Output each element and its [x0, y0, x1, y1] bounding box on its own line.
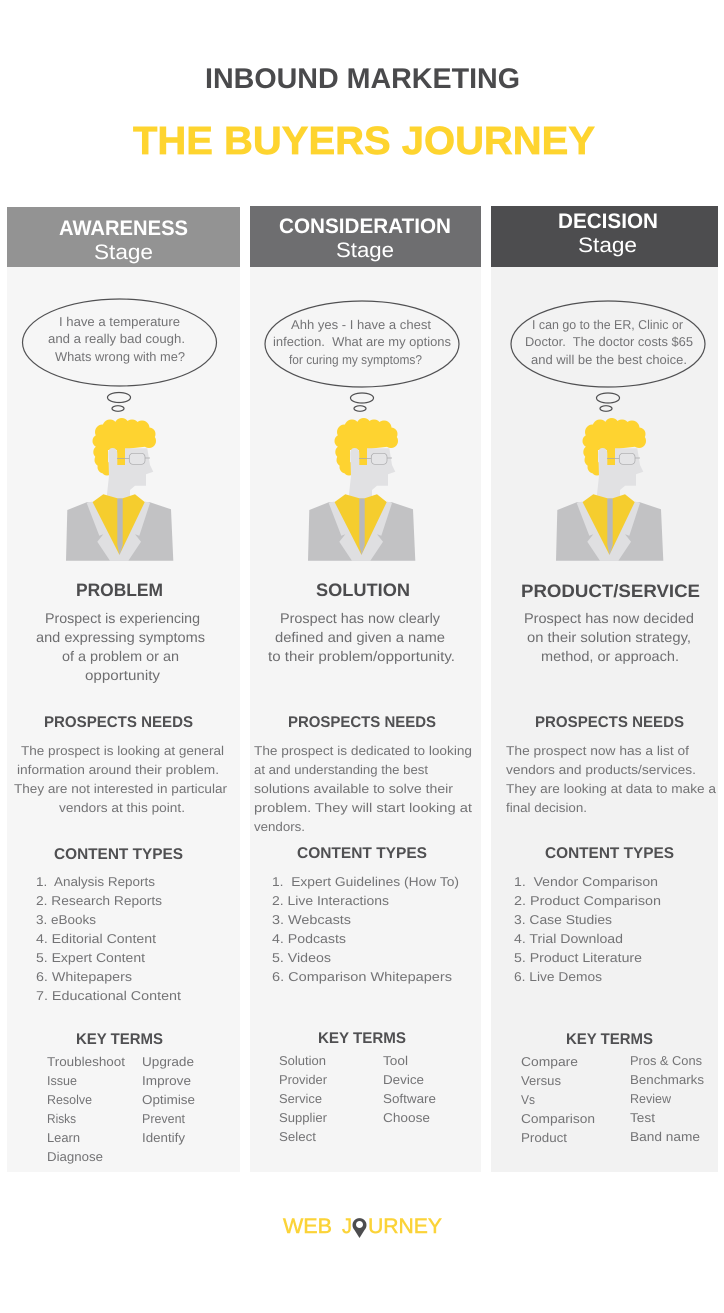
- panel: decision column: [491, 206, 718, 1172]
- heading: solution: SOLUTION: [316, 580, 410, 600]
- product/service description: Prospect has now decided: [524, 610, 694, 626]
- key terms list: Test: [630, 1110, 655, 1125]
- key terms list: Supplier: [279, 1110, 328, 1125]
- content types list: 2. Product Comparison: [514, 893, 661, 908]
- thought bubble: Ahh yes - I have a chest: [291, 317, 431, 332]
- thought bubble: and will be the best choice.: [531, 352, 687, 367]
- thought bubble: for curing my symptoms?: [289, 352, 422, 367]
- key terms list: Vs: [521, 1092, 535, 1107]
- thought bubble: I have a temperature: [59, 314, 180, 329]
- problem description: and expressing symptoms: [36, 629, 205, 645]
- heading: key terms: KEY TERMS: [318, 1030, 406, 1047]
- panel background: [7, 267, 240, 1172]
- logo: web journey: [283, 1215, 442, 1238]
- problem description: of a problem or an: [62, 648, 179, 664]
- key terms list: Improve: [142, 1073, 191, 1088]
- key terms list: [279, 1053, 436, 1144]
- content types list: 6. Comparison Whitepapers: [272, 969, 452, 984]
- content types list: 1. Vendor Comparison: [514, 874, 658, 889]
- thought bubble: [511, 301, 705, 411]
- content types list: 6. Whitepapers: [36, 969, 132, 984]
- heading: prospects needs: PROSPECTS NEEDS: [288, 714, 436, 731]
- key terms list: Issue: [47, 1073, 77, 1088]
- thought bubble: [22, 299, 216, 411]
- prospects needs text: The prospect is dedicated to looking: [254, 743, 472, 758]
- heading: key terms: KEY TERMS: [76, 1031, 163, 1048]
- key terms list: Troubleshoot: [47, 1054, 125, 1069]
- prospects needs text: vendors at this point.: [59, 800, 185, 815]
- problem description: [36, 610, 205, 683]
- solution description: defined and given a name: [275, 629, 445, 645]
- awareness stage header: [7, 207, 240, 267]
- content types list: 7. Educational Content: [36, 988, 181, 1003]
- decision stage header: Stage: [578, 234, 637, 257]
- key terms list: Identify: [142, 1130, 186, 1145]
- awareness stage header: Stage: [94, 241, 153, 264]
- thought bubble: I can go to the ER, Clinic or: [532, 317, 684, 332]
- heading: content types: CONTENT TYPES: [545, 845, 674, 862]
- key terms list: Prevent: [142, 1111, 185, 1126]
- title: the buyers journey: THE BUYERS JOURNEY: [133, 119, 595, 163]
- key terms list: Learn: [47, 1130, 80, 1145]
- decision stage header: DECISION: [558, 210, 658, 233]
- content types list: 4. Podcasts: [272, 931, 346, 946]
- logo: web journey: WEB: [283, 1215, 332, 1238]
- icon: person: [66, 418, 173, 561]
- heading: content types: CONTENT TYPES: [54, 846, 183, 863]
- heading: content types: CONTENT TYPES: [297, 845, 427, 862]
- key terms list: Risks: [47, 1111, 76, 1126]
- thought bubble: infection. What are my options: [273, 334, 451, 349]
- key terms list: Product: [521, 1130, 567, 1145]
- panel: consideration column: [250, 206, 481, 1172]
- content types list: 1. Expert Guidelines (How To): [272, 874, 459, 889]
- panel background: [491, 267, 718, 1172]
- key terms list: Choose: [383, 1110, 430, 1125]
- key terms list: Band name: [630, 1129, 700, 1144]
- thought bubble: and a really bad cough.: [48, 331, 185, 346]
- thought bubble: [265, 301, 459, 411]
- solution description: Prospect has now clearly: [280, 610, 440, 626]
- product/service description: method, or approach.: [541, 648, 679, 664]
- key terms list: Diagnose: [47, 1149, 103, 1164]
- logo: web journey: J: [342, 1215, 352, 1238]
- key terms list: Solution: [279, 1053, 326, 1068]
- prospects needs text: The prospect is looking at general: [21, 743, 224, 758]
- key terms list: Benchmarks: [630, 1072, 704, 1087]
- panel background: [250, 267, 481, 1172]
- key terms list: Device: [383, 1072, 424, 1087]
- consideration stage header: Stage: [336, 239, 394, 262]
- content types list: 3. Webcasts: [272, 912, 351, 927]
- content types list: 5. Videos: [272, 950, 331, 965]
- key terms list: Comparison: [521, 1111, 595, 1126]
- heading: key terms: KEY TERMS: [566, 1031, 653, 1048]
- prospects needs text: [506, 743, 717, 815]
- panel: awareness column: [7, 207, 240, 1172]
- content types list: [36, 874, 181, 1003]
- prospects needs text: [254, 743, 473, 834]
- logo: web journey: URNEY: [368, 1215, 442, 1238]
- thought bubble: Doctor. The doctor costs $65: [525, 334, 693, 349]
- content types list: 5. Expert Content: [36, 950, 145, 965]
- key terms list: Provider: [279, 1072, 328, 1087]
- icon: map pin: [352, 1218, 367, 1238]
- content types list: 5. Product Literature: [514, 950, 642, 965]
- consideration stage header: [250, 206, 481, 267]
- key terms list: Compare: [521, 1054, 578, 1069]
- key terms list: Select: [279, 1129, 316, 1144]
- problem description: opportunity: [85, 667, 160, 683]
- prospects needs text: at and understanding the best: [254, 762, 428, 777]
- content types list: [514, 874, 661, 984]
- heading: problem: PROBLEM: [76, 580, 163, 600]
- product/service description: [524, 610, 694, 664]
- prospects needs text: They are looking at data to make a: [506, 781, 717, 796]
- problem description: Prospect is experiencing: [45, 610, 200, 626]
- icon: person: [308, 418, 415, 561]
- prospects needs text: They are not interested in particular: [14, 781, 228, 796]
- key terms list: Upgrade: [142, 1054, 194, 1069]
- key terms list: Optimise: [142, 1092, 195, 1107]
- key terms list: Software: [383, 1091, 436, 1106]
- content types list: 3. eBooks: [36, 912, 96, 927]
- solution description: to their problem/opportunity.: [268, 648, 455, 664]
- prospects needs text: vendors.: [254, 819, 305, 834]
- consideration stage header: CONSIDERATION: [279, 215, 451, 238]
- product/service description: on their solution strategy,: [527, 629, 691, 645]
- content types list: 1. Analysis Reports: [36, 874, 155, 889]
- heading: product/service: PRODUCT/SERVICE: [521, 581, 700, 601]
- thought bubble: Whats wrong with me?: [55, 349, 185, 364]
- heading: prospects needs: PROSPECTS NEEDS: [44, 714, 193, 731]
- key terms list: Service: [279, 1091, 322, 1106]
- key terms list: Tool: [383, 1053, 408, 1068]
- content types list: 6. Live Demos: [514, 969, 602, 984]
- key terms list: Versus: [521, 1073, 561, 1088]
- key terms list: Resolve: [47, 1092, 92, 1107]
- decision stage header: [491, 206, 718, 267]
- content types list: 3. Case Studies: [514, 912, 612, 927]
- key terms list: [47, 1054, 195, 1164]
- prospects needs text: final decision.: [506, 800, 587, 815]
- awareness stage header: AWARENESS: [59, 217, 188, 240]
- prospects needs text: The prospect now has a list of: [506, 743, 689, 758]
- key terms list: [521, 1053, 704, 1145]
- content types list: [272, 874, 459, 984]
- heading: prospects needs: PROSPECTS NEEDS: [535, 714, 684, 731]
- content types list: 4. Trial Download: [514, 931, 623, 946]
- prospects needs text: vendors and products/services.: [506, 762, 696, 777]
- prospects needs text: information around their problem.: [17, 762, 219, 777]
- prospects needs text: solutions available to solve their: [254, 781, 454, 796]
- solution description: [268, 610, 455, 664]
- content types list: 2. Research Reports: [36, 893, 162, 908]
- key terms list: Review: [630, 1091, 672, 1106]
- content types list: 4. Editorial Content: [36, 931, 156, 946]
- key terms list: Pros & Cons: [630, 1053, 702, 1068]
- prospects needs text: problem. They will start looking at: [254, 800, 473, 815]
- title: inbound marketing: INBOUND MARKETING: [205, 63, 520, 95]
- prospects needs text: [14, 743, 228, 815]
- content types list: 2. Live Interactions: [272, 893, 389, 908]
- icon: person: [556, 418, 663, 561]
